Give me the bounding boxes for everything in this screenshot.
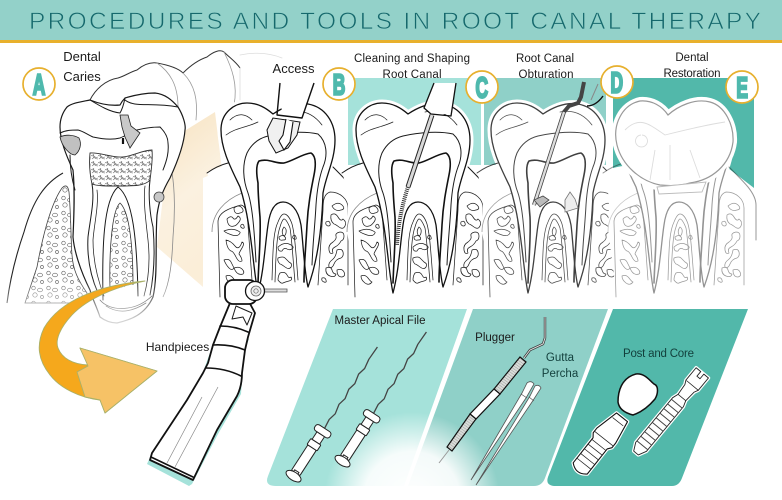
outer bone line [7,173,63,303]
root canals and arches [88,180,154,295]
label: gutta percha [542,352,579,380]
tooth D: obturation [477,103,630,297]
restored crown [616,101,733,194]
magnification fade behind tooth A [157,112,222,287]
back molars [90,51,282,120]
large orange arrow [39,281,157,413]
tooth C: cleaning and shaping [342,83,495,297]
access cavity [267,118,300,153]
file two [333,327,434,470]
badge A: A [33,69,45,102]
panel: post and core [547,309,748,486]
label: gutta percha: Percha [542,368,579,380]
handpiece [147,280,287,486]
right bone line [163,173,174,297]
white fade over tool panels [320,400,510,500]
crown [618,374,658,415]
badge D [601,66,633,100]
label: cleaning and shaping: Cleaning and Shaping [354,53,470,65]
badge C [466,71,498,105]
label: master apical file: Master Apical File [334,315,426,327]
tooth B: access [207,83,360,297]
occlusal lines and enamel boundary [60,98,178,170]
label: handpieces: Handpieces [146,340,209,354]
panel: restoration background [613,78,754,188]
title: PROCEDURES AND TOOLS IN ROOT CANAL THERAPY [29,8,761,35]
cutaway crown and roots [60,93,185,323]
plugger instrument [439,317,545,463]
badge E: E [736,72,748,105]
label: dental caries: Dental [63,49,101,64]
handle of endodontic file [424,83,456,114]
badge D: D [611,67,623,100]
pulp chamber [90,150,152,186]
label: post and core: Post and Core [623,348,694,360]
badge E [726,71,758,105]
panel: master apical file [267,309,467,486]
header band [0,0,782,43]
label: dental caries [63,49,101,84]
label: root canal obturation [516,53,574,81]
label: root canal obturation: Root Canal [516,53,574,65]
plugger in canal [534,82,603,212]
illustration: dental caries cutaway tooth [0,51,282,348]
badge B: B [333,69,345,102]
file one [284,342,385,485]
label: cleaning and shaping [354,53,470,81]
tooth E: restoration [603,103,756,297]
periapical spot [154,192,164,202]
left bone block [25,186,87,303]
lower fade [0,278,205,348]
screw post [630,368,708,458]
gutta percha points [471,382,541,485]
panel: cleaning and shaping background [348,78,481,165]
label: root canal obturation: Obturation [518,69,574,81]
label: plugger: Plugger [475,332,515,344]
file shaft [408,115,432,187]
label: dental caries: Caries [63,69,101,84]
panel: plugger and gutta percha [408,309,608,486]
label: gutta percha: Gutta [546,352,575,364]
panel: obturation background [484,78,606,165]
badge C: C [476,72,488,105]
label: dental restoration: Dental [675,52,709,64]
badge B [323,68,355,102]
label: access: Access [273,61,315,76]
access bur [280,83,314,118]
label: dental restoration: Restoration [664,68,720,80]
badge A [23,68,55,102]
label: dental restoration [664,52,720,80]
label: cleaning and shaping: Root Canal [382,69,442,81]
abutment and implant [568,409,631,479]
file spiral [397,187,408,245]
caries lesions [60,135,80,155]
